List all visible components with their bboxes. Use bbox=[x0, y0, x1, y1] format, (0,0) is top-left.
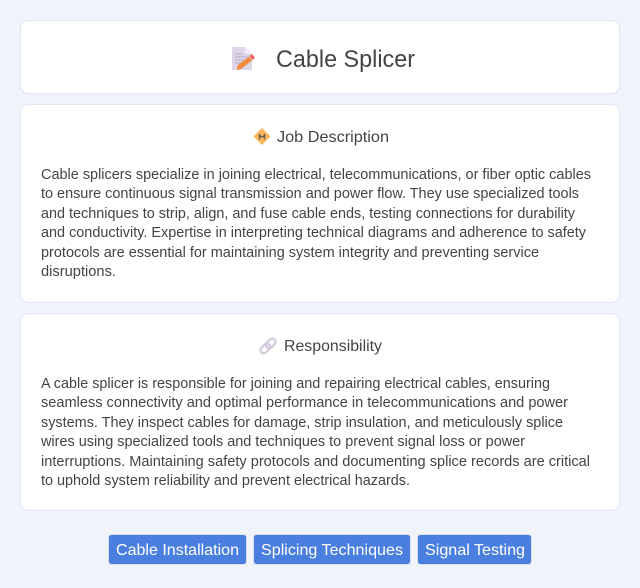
tag: Signal Testing: Signal Testing bbox=[425, 542, 525, 559]
job description text: and conductivity. Expertise in interpreting technical diagrams and adherence to safety bbox=[41, 225, 587, 241]
job description heading: Job Description bbox=[277, 129, 389, 146]
icon: document with pencil bbox=[232, 47, 255, 70]
job description text: disruptions. bbox=[41, 264, 116, 280]
job description text: Cable splicers specialize in joining electrical, telecommunications, or fiber optic cables bbox=[41, 167, 591, 183]
panel: title bbox=[20, 20, 620, 94]
panel: job description bbox=[20, 104, 620, 302]
panel: responsibility bbox=[20, 314, 620, 510]
responsibility text: seamless connectivity and optimal performance in telecommunications and power bbox=[41, 395, 568, 411]
icon: chain link bbox=[259, 337, 277, 355]
tag: Cable Installation bbox=[108, 534, 246, 564]
icon: construction diamond bbox=[254, 129, 270, 144]
job description text: to ensure continuous signal transmission and power flow. They use specialized tools bbox=[41, 186, 579, 202]
responsibility text: to uphold system reliability and prevent electrical hazards. bbox=[41, 473, 410, 489]
responsibility text: systems. They inspect cables for damage, strip insulation, and meticulously splice bbox=[41, 415, 563, 431]
tag: Cable Installation: Cable Installation bbox=[116, 542, 239, 559]
tag: Splicing Techniques bbox=[254, 534, 410, 564]
responsibility text: interruptions. Maintaining safety protocols and documenting splice records are critical bbox=[41, 454, 590, 470]
tag: Signal Testing bbox=[418, 534, 532, 564]
responsibility text bbox=[40, 376, 590, 489]
job description text bbox=[41, 167, 591, 280]
job description text: and techniques to strip, align, and fuse cable ends, testing connections for durability bbox=[41, 206, 576, 222]
responsibility text: wires using specialized tools and techniques to prevent signal loss or power bbox=[40, 434, 525, 450]
title text: Cable Splicer bbox=[276, 46, 415, 73]
job description text: protocols are essential for maintaining system integrity and preventing service bbox=[41, 245, 539, 261]
tag: Splicing Techniques: Splicing Techniques bbox=[261, 542, 403, 559]
responsibility heading: Responsibility bbox=[284, 338, 382, 355]
responsibility text: A cable splicer is responsible for joining and repairing electrical cables, ensuring bbox=[41, 376, 550, 392]
